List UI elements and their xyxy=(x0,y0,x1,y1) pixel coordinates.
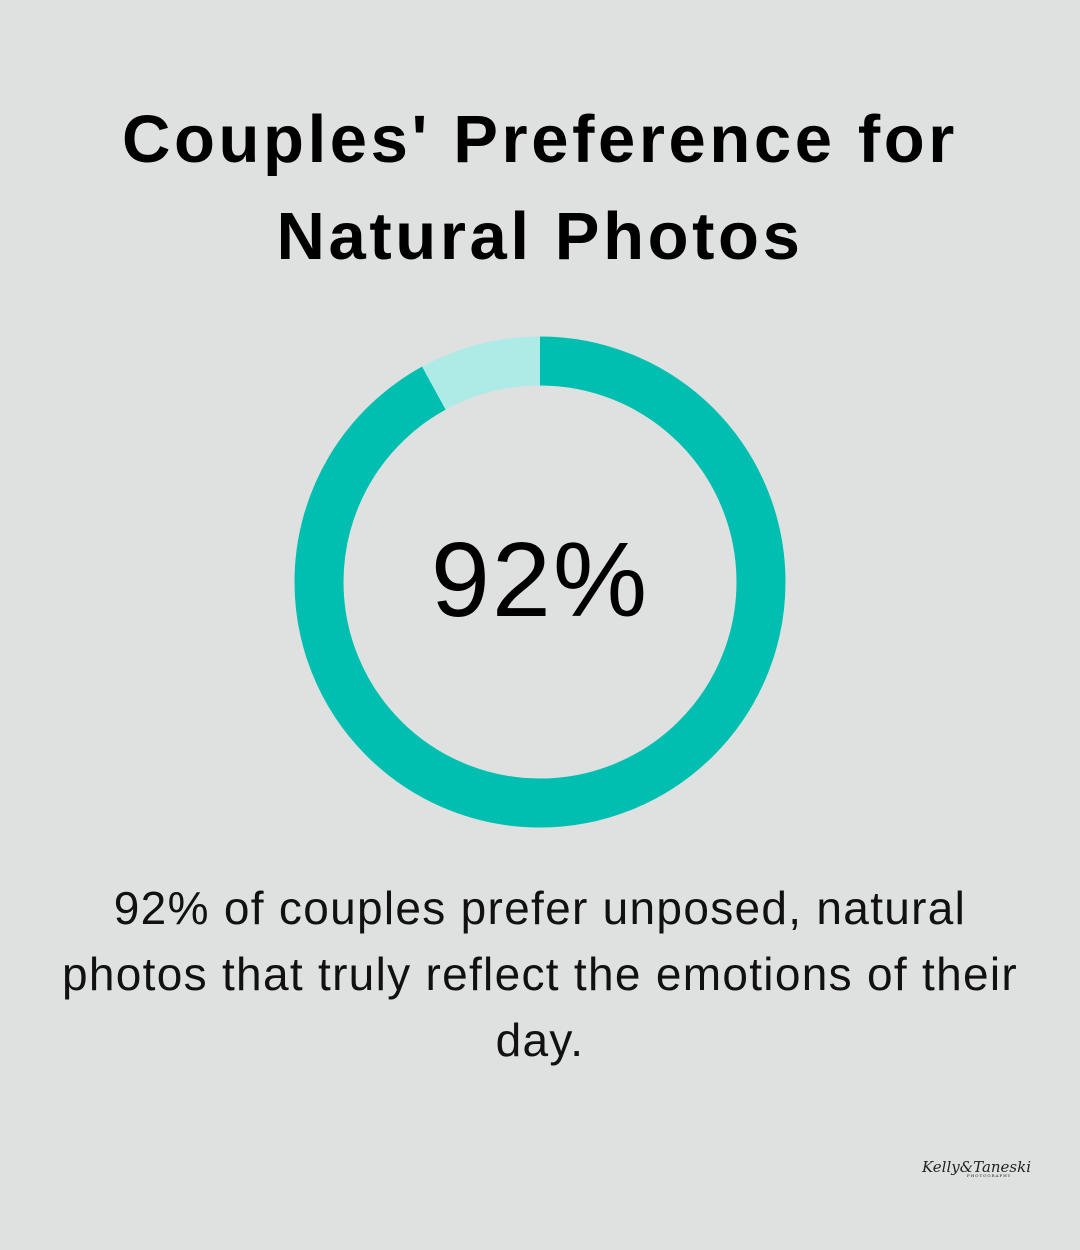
logo: signature: PHOTOGRAPHY xyxy=(967,1173,1011,1178)
title: Natural Photos xyxy=(277,199,803,274)
logo: signature: Kelly&Taneski xyxy=(922,1158,1031,1176)
text block: description xyxy=(62,882,1018,1066)
text block: description: 92% of couples prefer unposed, natural xyxy=(114,882,966,934)
donut chart: 92% xyxy=(431,521,649,639)
text block: description: photos that truly reflect the emotions of their xyxy=(62,948,1018,1000)
title: Couples' Preference for xyxy=(122,102,958,177)
text block: description: day. xyxy=(496,1014,584,1066)
title xyxy=(122,102,958,274)
